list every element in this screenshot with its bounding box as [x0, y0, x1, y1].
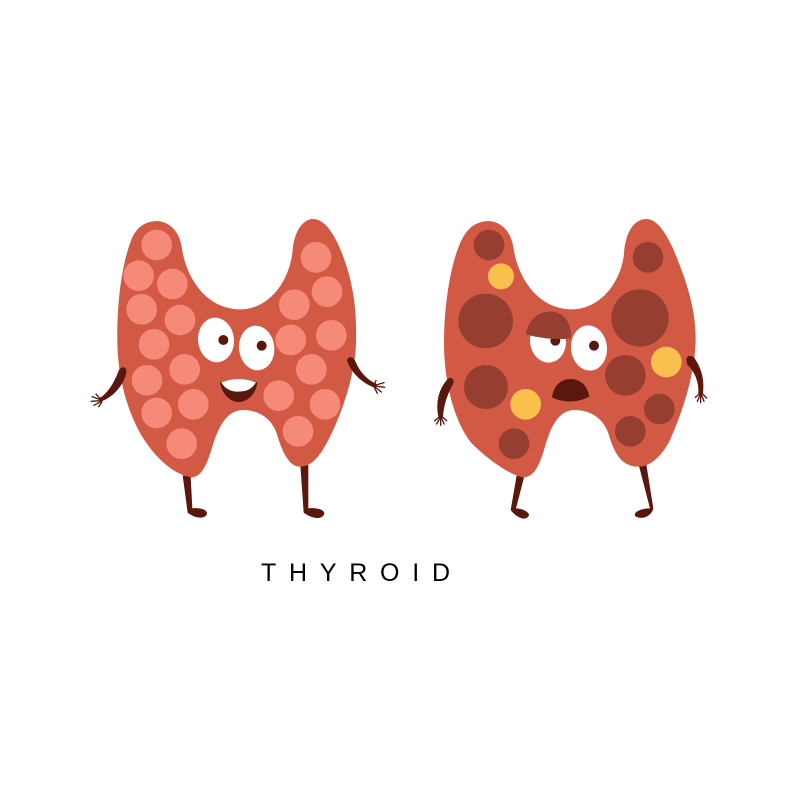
- unhealthy left arm: [435, 378, 453, 425]
- yellow nodules: [488, 263, 682, 420]
- healthy right arm: [347, 358, 385, 393]
- unhealthy face eyes: [528, 318, 609, 372]
- healthy left leg: [183, 475, 207, 518]
- healthy thyroid character: [91, 219, 385, 518]
- unhealthy right arm: [687, 356, 707, 403]
- drooping eyelid: [526, 312, 571, 339]
- unhealthy right leg: [635, 465, 653, 518]
- healthy smiling mouth: [220, 379, 257, 402]
- healthy face eyes: [196, 316, 277, 372]
- unhealthy thyroid character: [435, 219, 707, 519]
- healthy body: [117, 219, 356, 477]
- healthy left arm: [91, 368, 126, 407]
- unhealthy body: [444, 219, 696, 477]
- open worried mouth: [552, 379, 589, 401]
- unhealthy left leg: [511, 475, 529, 519]
- healthy follicles: [123, 230, 347, 459]
- healthy right leg: [300, 465, 324, 518]
- title: THYROID: [261, 559, 450, 587]
- dark nodules: [458, 230, 675, 459]
